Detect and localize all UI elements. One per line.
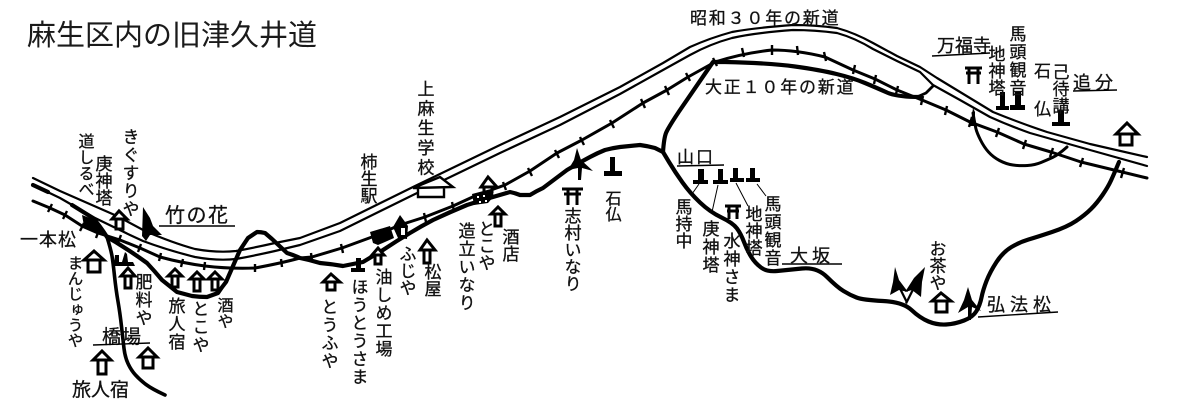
label: 石仏 right: 仏: [1034, 100, 1051, 119]
label: とうふや: とうふや: [318, 298, 338, 370]
label: 柿生駅: 柿生駅: [358, 153, 377, 204]
label: 大正10年の新道: 大正１０年の新道: [705, 78, 855, 97]
label: 旅人宿 row: 旅人宿: [72, 379, 129, 401]
label: 己待講: 己待講: [1050, 63, 1069, 114]
label: ふじや: ふじや: [396, 245, 416, 296]
road: railway line with ticks: [33, 45, 1147, 272]
place name: 橋場: [93, 326, 150, 348]
label: きぐすりや: きぐすりや: [120, 128, 138, 218]
label: 地神塔 centre: 地神塔: [742, 205, 762, 256]
label: 肥料や: 肥料や: [132, 273, 152, 327]
label: 上麻生学校: 上麻生学校: [414, 80, 434, 178]
label: 水神さま: 水神さま: [720, 232, 740, 304]
label: 石仏 right: [1034, 62, 1051, 119]
icon: shrine gates: [562, 68, 982, 219]
label: 昭和30年の新道: 昭和３０年の新道: [690, 9, 840, 28]
label: 酒や: 酒や: [214, 297, 234, 329]
place name: 弘法松: 弘法松: [987, 295, 1056, 315]
label: 旅人宿 column: 旅人宿: [166, 297, 185, 351]
label: ほうとうさま: ほうとうさま: [348, 278, 368, 386]
label: 志村いなり: 志村いなり: [562, 207, 581, 292]
label: 馬頭観音 centre: 馬頭観音: [762, 195, 781, 267]
label: 地神塔 right: 地神塔: [986, 45, 1005, 96]
title: 麻生区内の旧津久井道: [27, 19, 317, 52]
icon: stone monuments: [114, 92, 1070, 272]
label: 酒店: 酒店: [500, 228, 519, 262]
label: 道しるべ: 道しるべ: [76, 133, 94, 197]
label: とこや centre: とこや: [476, 220, 494, 271]
place name: 追分: 追分: [1073, 73, 1117, 93]
place name: 竹の花: 竹の花: [165, 204, 230, 227]
label: 松屋: 松屋: [422, 263, 441, 297]
place name: 大坂: 大坂: [790, 246, 834, 266]
label: 石仏 right: 石: [1034, 62, 1051, 81]
icon: school building: [413, 177, 453, 197]
label: 油しめ工場: 油しめ工場: [372, 268, 392, 358]
label: 馬頭観音 right: 馬頭観音: [1006, 25, 1026, 97]
label: まんじゅうや: まんじゅうや: [66, 255, 82, 348]
label: 馬持中: 馬持中: [672, 198, 692, 249]
icon: oil factory and shops: [370, 189, 494, 245]
icon: pine trees: [82, 108, 981, 320]
leader lines: stones to labels: [692, 183, 766, 212]
label: お茶や: お茶や: [926, 240, 946, 291]
place name: 橋場: 橋場: [102, 326, 142, 348]
label: 一本松: 一本松: [20, 230, 77, 250]
place name: 万福寺: 万福寺: [937, 36, 991, 56]
road: Showa 30 new road double line: [33, 25, 1147, 260]
label: とこや: とこや: [190, 300, 208, 354]
place name: 山口: 山口: [677, 148, 715, 167]
label: 庚神塔 centre: 庚神塔: [700, 220, 719, 274]
icon: house markers: [84, 123, 1138, 374]
label: 庚神塔 left: 庚神塔: [92, 155, 112, 206]
label: 造立いなり: 造立いなり: [456, 222, 475, 312]
road: old Tsukui road thick line: [33, 62, 1119, 395]
label: 石仏 centre: 石仏: [602, 190, 622, 222]
